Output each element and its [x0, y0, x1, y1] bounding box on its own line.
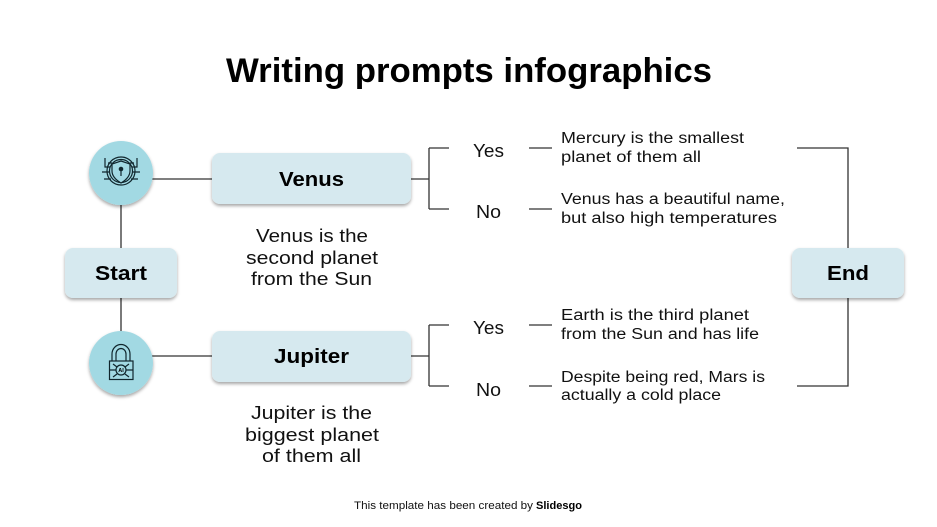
box: Start: Start [95, 263, 147, 285]
text: Mars: Despite being red, Mars is [561, 369, 765, 386]
icon: AI padlock circle [89, 331, 153, 395]
box: Jupiter [212, 331, 411, 382]
text: Venus answer: but also high temperatures [561, 210, 777, 227]
text: Venus description: second planet [246, 248, 378, 268]
text: Earth: Earth is the third planet [561, 307, 750, 324]
labels: Jupiter yes and no: Yes [473, 318, 504, 338]
footer credit: This template has been created by [354, 500, 534, 512]
text: Venus description: Venus is the [256, 226, 368, 246]
box: Venus [212, 153, 411, 204]
box: End: End [827, 263, 869, 285]
text: Jupiter description: of them all [262, 446, 361, 466]
icon: AI padlock circle: AI [118, 368, 124, 374]
text: Mercury: planet of them all [561, 149, 701, 166]
text: Earth [561, 307, 759, 343]
text: Earth: from the Sun and has life [561, 326, 759, 343]
text: Jupiter description: biggest planet [245, 425, 379, 445]
labels: Jupiter yes and no [473, 318, 504, 400]
text: Mars: actually a cold place [561, 387, 721, 404]
footer credit: Slidesgo [536, 500, 582, 512]
box: End [792, 248, 904, 298]
text: Venus description: from the Sun [251, 269, 372, 289]
text: Mars [561, 369, 765, 404]
text: Venus answer: Venus has a beautiful name, [561, 191, 785, 208]
icon: security shield circle [89, 141, 153, 205]
labels: Venus yes and no [473, 141, 504, 222]
box: Venus: Venus [279, 169, 344, 191]
box: Jupiter: Jupiter [274, 346, 349, 368]
labels: Venus yes and no: Yes [473, 141, 504, 161]
text: Venus answer [561, 191, 785, 227]
box: Start [65, 248, 177, 298]
labels: Venus yes and no: No [476, 202, 501, 222]
labels: Jupiter yes and no: No [476, 380, 501, 400]
text: Mercury [561, 130, 745, 166]
text: Mercury: Mercury is the smallest [561, 130, 745, 147]
text: Jupiter description [245, 403, 379, 466]
text: Jupiter description: Jupiter is the [251, 403, 372, 423]
connector lines [121, 148, 848, 386]
text: Venus description [246, 226, 378, 289]
title: Writing prompts infographics [226, 52, 712, 90]
